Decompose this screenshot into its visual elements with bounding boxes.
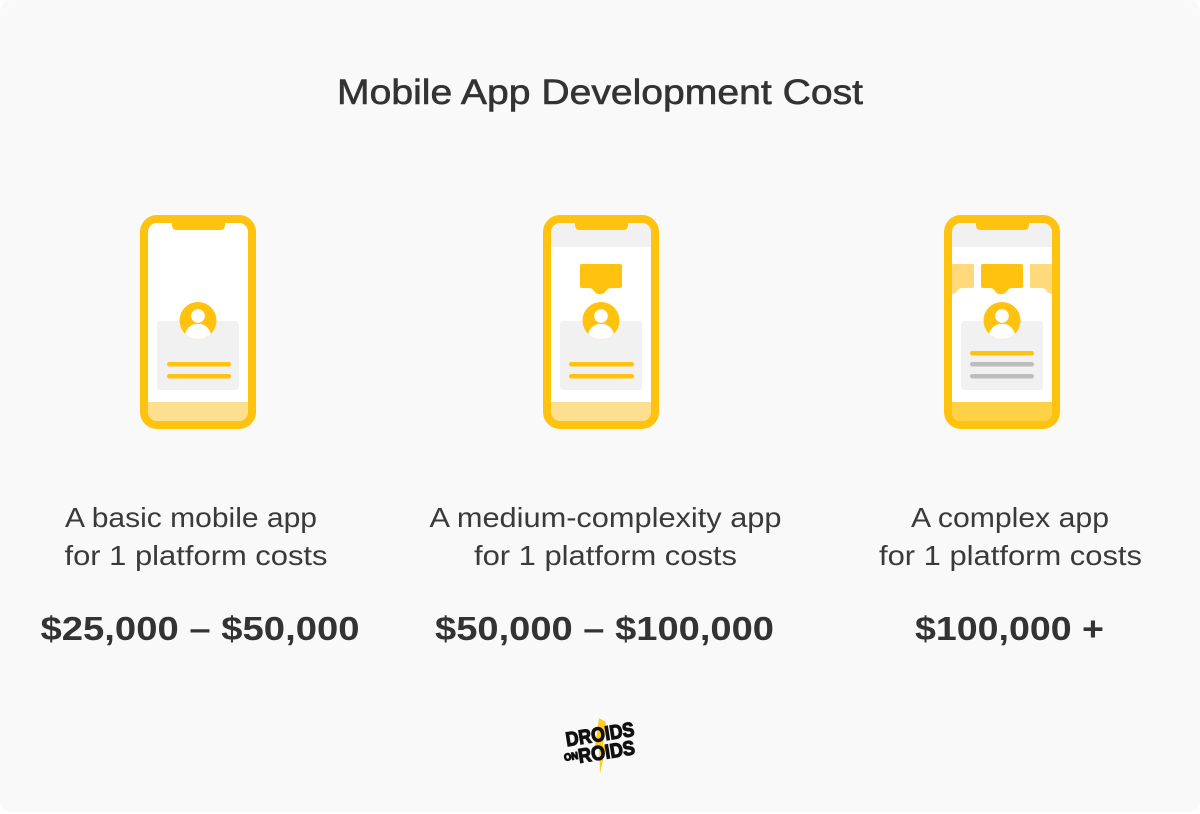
icon: complex phone	[948, 219, 1056, 425]
panel: basic app	[40, 219, 360, 647]
icon: basic phone	[144, 219, 252, 425]
icon: medium phone	[547, 219, 655, 425]
logo wordmark: DROIDS	[564, 719, 636, 751]
title: Mobile App Development Cost	[337, 73, 863, 112]
text: basic app description: A basic mobile app	[65, 502, 317, 533]
price: basic app: $25,000 – $50,000	[40, 610, 360, 647]
text: medium app description: A medium-complexity app	[430, 502, 782, 533]
price: medium app: $50,000 – $100,000	[435, 610, 774, 647]
panel: complex app	[879, 219, 1142, 647]
text: complex app description: A complex app	[911, 502, 1109, 533]
text: complex app description: for 1 platform costs	[879, 540, 1142, 571]
panel: medium app	[430, 219, 782, 647]
text: medium app description: for 1 platform costs	[474, 540, 737, 571]
logo: Droids on Roids	[560, 718, 639, 774]
text: basic app description: for 1 platform costs	[64, 540, 328, 571]
logo wordmark: ROIDS	[577, 737, 636, 768]
price: complex app: $100,000 +	[915, 610, 1104, 647]
logo wordmark	[560, 719, 639, 770]
icon: lightning bolt	[595, 718, 606, 774]
logo wordmark: ON	[563, 751, 579, 764]
